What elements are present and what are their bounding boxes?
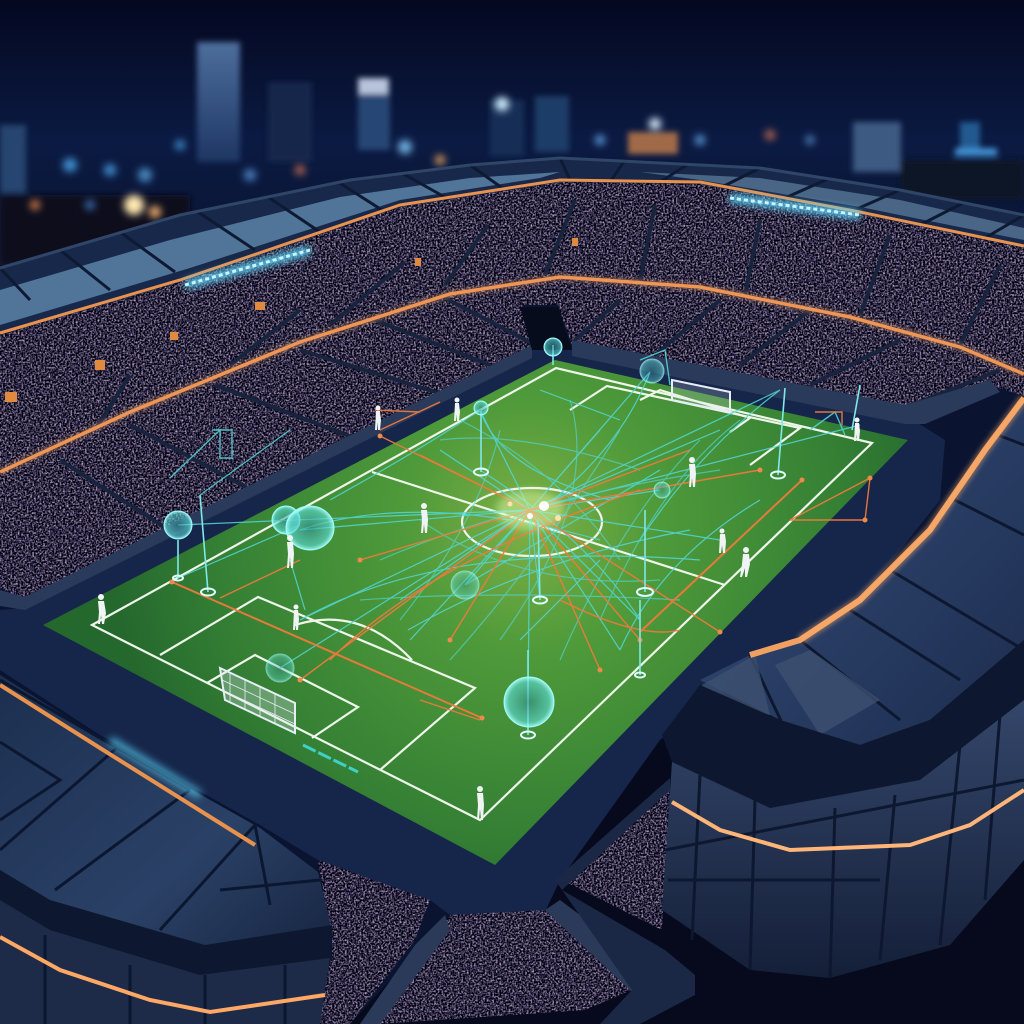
near-side data ticks — [303, 745, 358, 772]
right stand: glass roof and tower — [662, 398, 1024, 978]
centre glow — [496, 490, 564, 530]
roof: upper stand canopy — [0, 158, 1024, 335]
bottom crowd sections — [318, 778, 695, 1024]
led floodlights — [185, 198, 860, 285]
holographic poles — [173, 345, 860, 738]
analytics: data points — [170, 434, 872, 720]
pitch grass — [43, 360, 908, 865]
goal: near — [220, 668, 295, 733]
analytics: cyan passing lines — [170, 350, 860, 700]
dark ground at bottom — [350, 640, 1024, 1024]
left stand: glass roof and tower — [0, 675, 332, 1024]
lower tier crowd — [0, 279, 1024, 597]
tunnel — [520, 307, 572, 350]
pitch markings — [92, 368, 872, 820]
holographic spheres — [164, 338, 670, 727]
goal: far — [672, 380, 730, 412]
stand perimeter wall — [0, 340, 1000, 610]
concourse around pitch — [0, 350, 945, 915]
analytics: orange movement lines — [172, 402, 870, 720]
city skyline — [0, 42, 1024, 265]
upper tier crowd — [0, 182, 1024, 470]
players — [98, 398, 860, 820]
glowing orange ring between tiers — [0, 180, 1024, 472]
